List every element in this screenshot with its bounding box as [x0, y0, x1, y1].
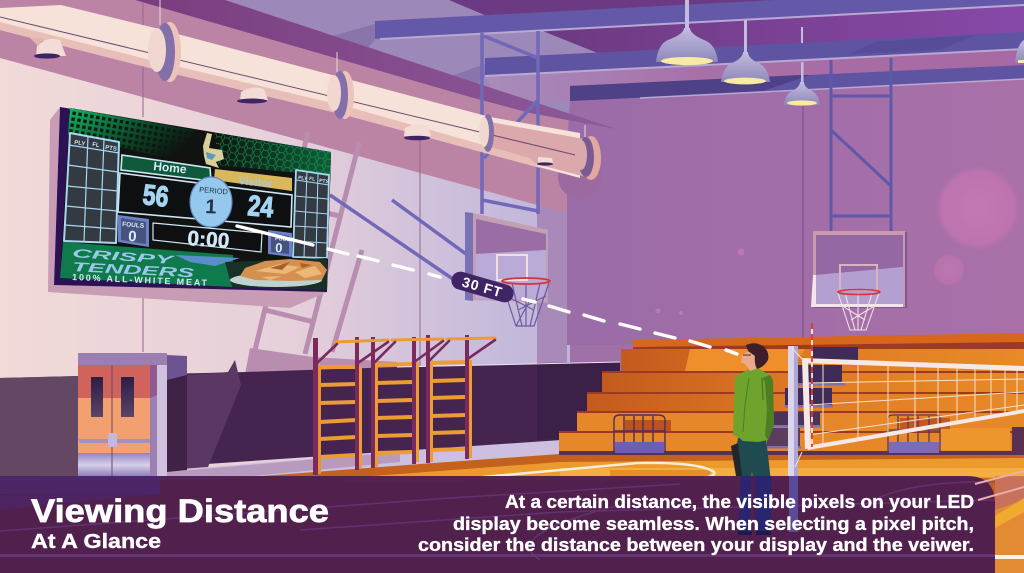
wall bars unit three — [426, 335, 472, 463]
ceiling background — [0, 0, 1024, 130]
scoreboard — [48, 107, 331, 308]
basketball hoop right — [811, 58, 907, 330]
fouls right — [268, 230, 294, 257]
volleyball pole — [788, 346, 802, 477]
ceiling beam three — [570, 65, 1024, 101]
visitor score: 24 — [246, 189, 275, 224]
wall bars unit two — [371, 337, 419, 468]
home score: 56 — [141, 178, 170, 213]
halftone pattern — [68, 108, 195, 160]
wall bars — [313, 335, 495, 475]
period badge: 1 — [205, 196, 217, 219]
wall shadow band under duct — [0, 0, 616, 214]
floor corner right — [975, 471, 1024, 573]
ad band — [60, 242, 233, 287]
caption panel — [0, 476, 995, 573]
floor — [0, 454, 1024, 573]
fouls right: FOULS — [275, 236, 294, 244]
description text: At a certain distance, the visible pixels on your LED — [505, 491, 974, 512]
wall bars top frame — [317, 338, 495, 363]
left player table — [64, 133, 119, 243]
right player table: PTS — [319, 178, 330, 185]
distance dashed line — [237, 226, 737, 354]
game clock: 0:00 — [187, 227, 230, 253]
basketball hoop left — [465, 212, 550, 326]
man legs — [735, 438, 772, 535]
lamp small — [784, 27, 820, 106]
period badge — [190, 177, 232, 227]
lamp large — [656, 0, 718, 65]
home label — [121, 155, 211, 181]
door windows — [91, 377, 103, 417]
logo figure — [203, 133, 224, 168]
duct ring four — [575, 136, 601, 180]
ad text: CRISPY — [72, 246, 176, 267]
wainscot dark wall band — [0, 360, 620, 480]
duct — [0, 5, 602, 199]
food plate — [225, 258, 327, 290]
fouls left: 0 — [128, 228, 137, 245]
score panel — [118, 173, 292, 227]
aisle stairs — [767, 347, 858, 448]
pendant lamps — [656, 0, 1024, 106]
duct lamps — [30, 38, 553, 166]
distance label 30 FT — [449, 270, 516, 304]
man coat — [733, 368, 774, 442]
net left — [502, 283, 549, 326]
cage right — [888, 415, 950, 453]
distance label 30 FT: 30 FT — [460, 274, 505, 300]
right player table: PLY — [298, 175, 308, 182]
lamp edge — [1015, 40, 1024, 63]
wall seam lines — [143, 3, 803, 366]
fouls left: FOULS — [122, 221, 145, 230]
backboard one support frame — [330, 31, 538, 288]
ad text — [72, 246, 240, 288]
hexagon pattern — [215, 133, 331, 176]
game clock — [153, 223, 262, 253]
description text: consider the distance between your display and the veiwer. — [418, 534, 974, 555]
ad text: 100% ALL-WHITE MEAT — [72, 272, 208, 288]
ceiling beam one — [375, 0, 1024, 39]
fouls left — [118, 215, 149, 247]
ceiling beam two — [485, 32, 1024, 76]
left wall — [0, 0, 570, 480]
net right — [838, 293, 879, 330]
duct ring three — [479, 114, 494, 152]
duct ring one — [148, 22, 181, 82]
left player table: PLY — [74, 140, 86, 148]
man viewer — [731, 343, 774, 535]
duct hanger wires — [160, 0, 585, 137]
description text: display become seamless. When selecting a pixel pitch, — [453, 513, 974, 534]
door — [78, 353, 187, 480]
cage left — [614, 415, 671, 453]
visitor label — [214, 169, 292, 191]
description text — [418, 491, 974, 555]
right player table — [293, 170, 330, 258]
wall bars unit one — [313, 337, 362, 475]
man head — [741, 349, 758, 371]
bokeh lights — [656, 166, 1020, 315]
door push bar — [79, 439, 150, 443]
left player table: FL — [92, 142, 100, 149]
home label: Home — [153, 159, 188, 177]
main heading: Viewing Distance — [31, 493, 329, 529]
period badge: PERIOD — [199, 185, 229, 197]
right player table: FL — [309, 176, 316, 183]
left player table: PTS — [105, 145, 117, 153]
roof beam — [135, 0, 616, 129]
man legs through panel — [738, 476, 772, 535]
visitor label: Visitor — [238, 175, 274, 191]
fouls right: 0 — [275, 240, 283, 255]
duct ring two — [327, 71, 354, 119]
wall seam strip — [537, 130, 567, 364]
ad text: TENDERS — [72, 259, 195, 280]
right wall — [567, 78, 1024, 345]
wall bars shadow — [245, 132, 397, 374]
lamp medium — [721, 20, 770, 84]
volleyball net — [802, 323, 1024, 450]
bleachers — [559, 333, 1024, 455]
sub heading: At A Glance — [31, 531, 161, 553]
